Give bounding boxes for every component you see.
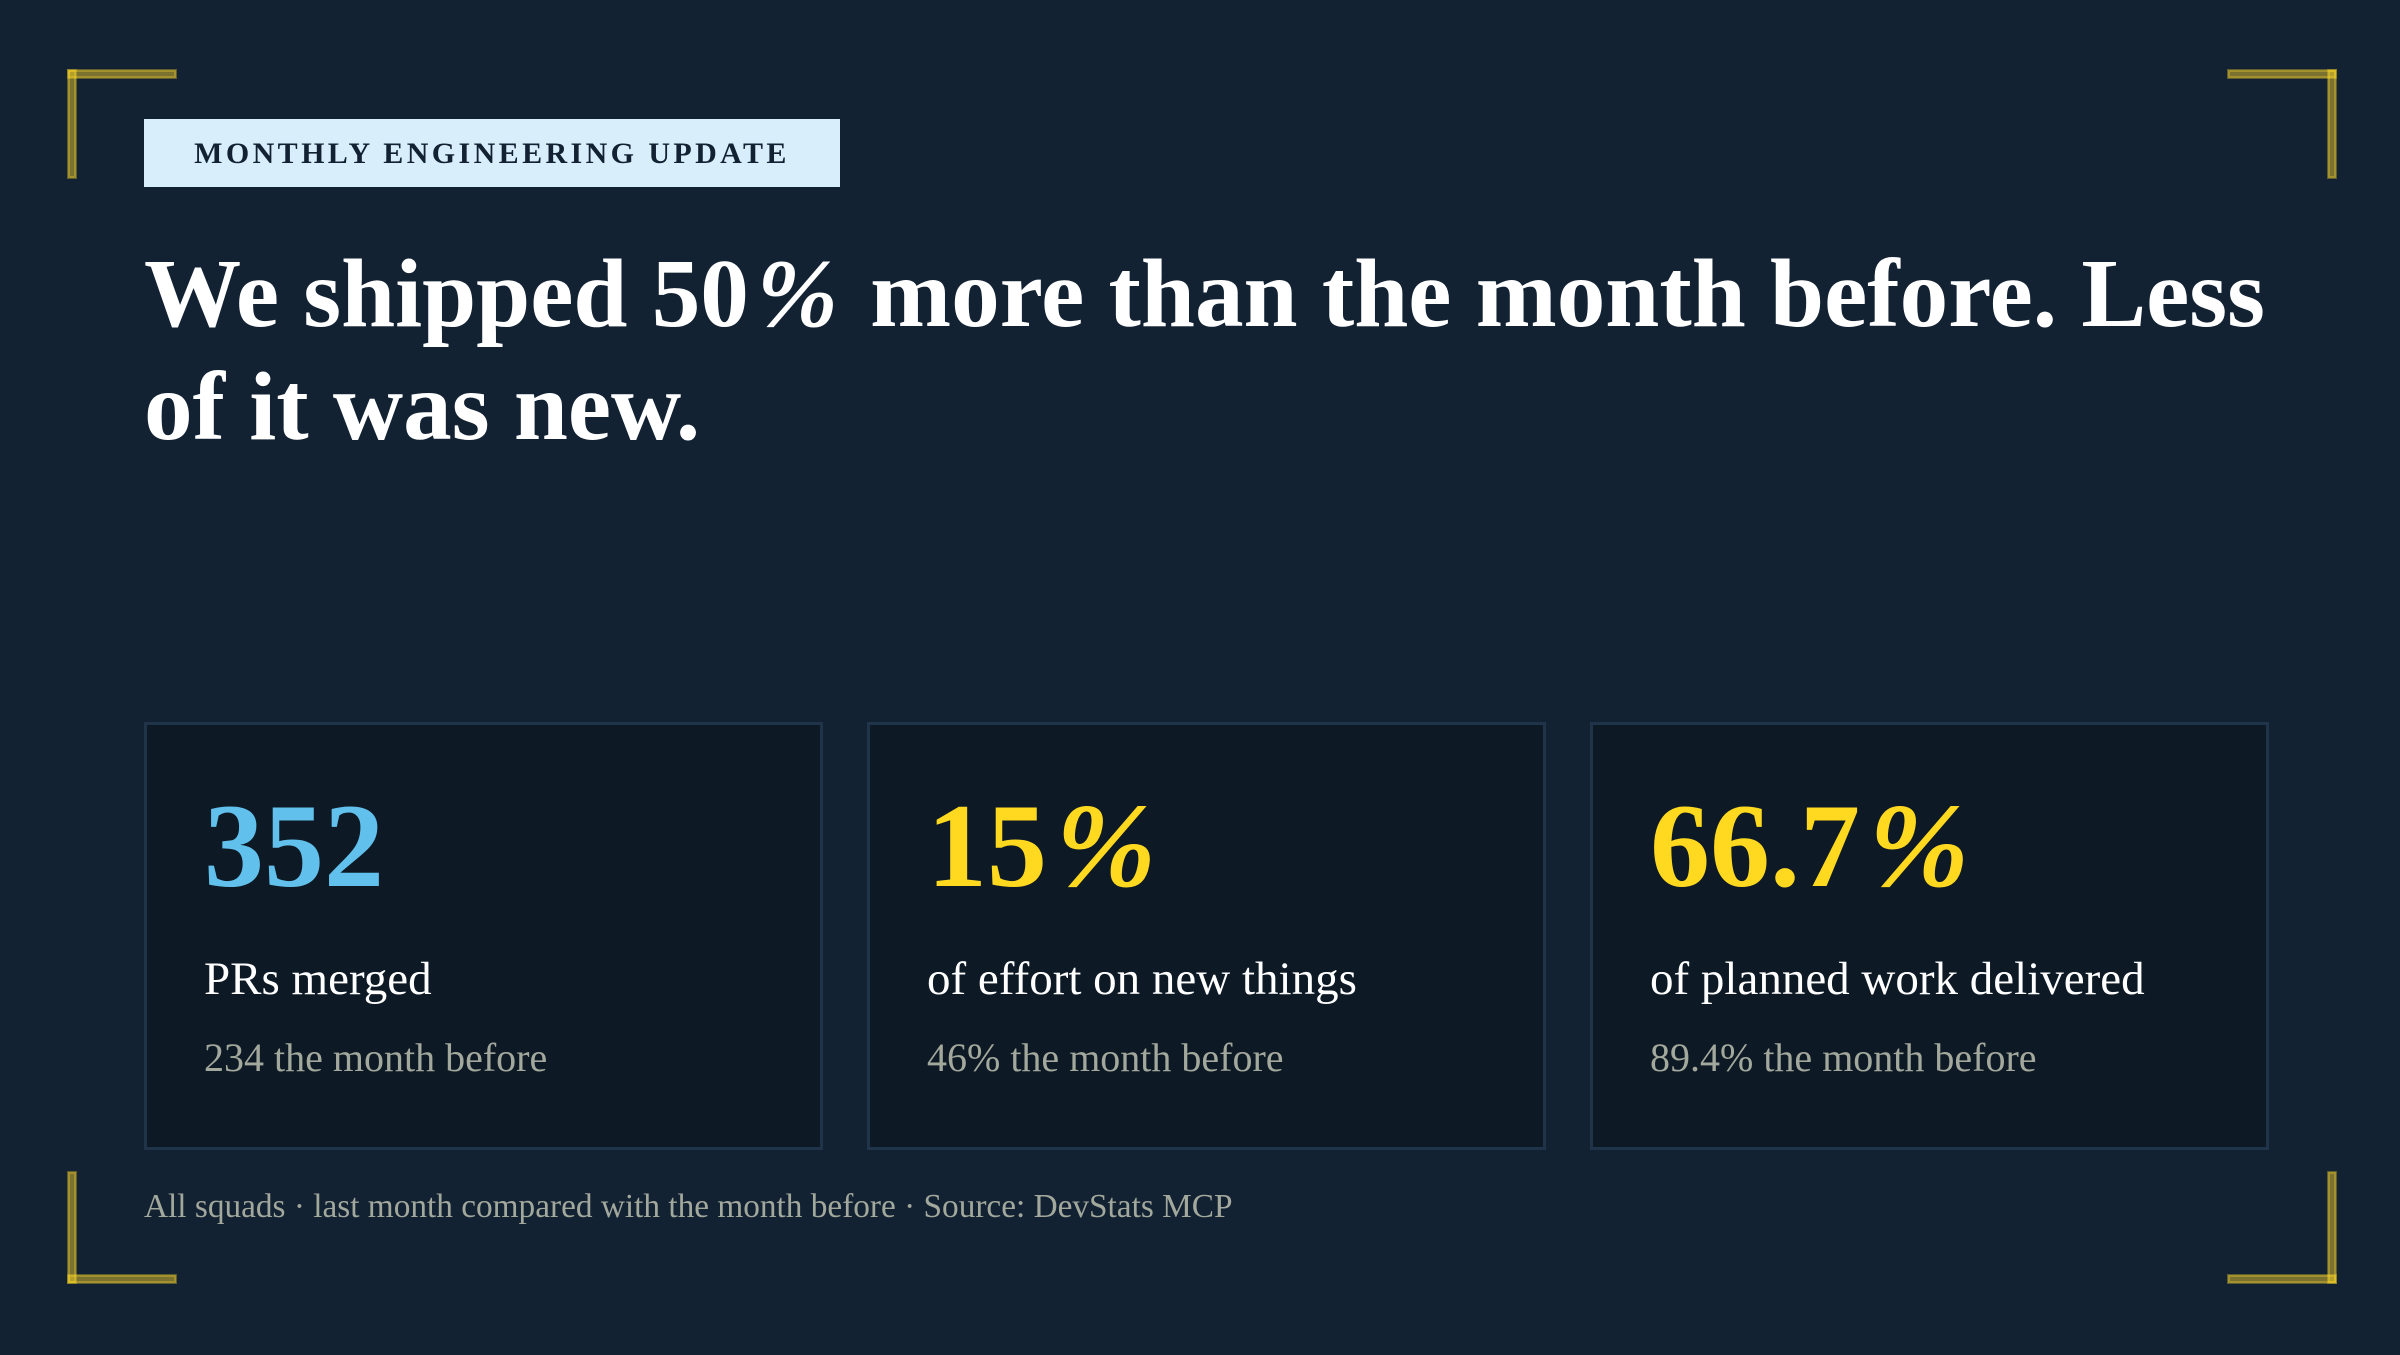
corner bracket: bottom left <box>67 1171 177 1284</box>
comparison: 46% the month before: 46% the month before <box>927 1035 1284 1080</box>
panel: planned work delivered <box>1590 722 2269 1150</box>
big number: 66.7%: 66.7% <box>1650 779 1969 912</box>
panel: PRs merged <box>144 722 823 1150</box>
title: of it was new. <box>144 353 700 461</box>
corner bracket: bottom right <box>2227 1171 2337 1284</box>
label: of planned work delivered: of planned work delivered <box>1650 953 2145 1005</box>
badge: monthly engineering update <box>144 119 840 187</box>
title <box>144 240 2265 461</box>
footer source note: All squads · last month compared with the month before · Source: DevStats MCP <box>144 1188 1232 1225</box>
badge: monthly engineering update: MONTHLY ENGINEERING UPDATE <box>194 137 790 170</box>
panel: effort on new things <box>867 722 1546 1150</box>
corner bracket: top left <box>67 69 177 179</box>
big number: 15%: 15% <box>927 779 1156 912</box>
title: We shipped 50% more than the month before. Less <box>144 240 2265 348</box>
big number: 352: 352 <box>204 779 384 912</box>
label: of effort on new things: of effort on new things <box>927 953 1357 1005</box>
comparison: 234 the month before: 234 the month before <box>204 1035 547 1080</box>
label: PRs merged: PRs merged <box>204 953 432 1005</box>
corner bracket: top right <box>2227 69 2337 179</box>
comparison: 89.4% the month before: 89.4% the month before <box>1650 1035 2037 1080</box>
